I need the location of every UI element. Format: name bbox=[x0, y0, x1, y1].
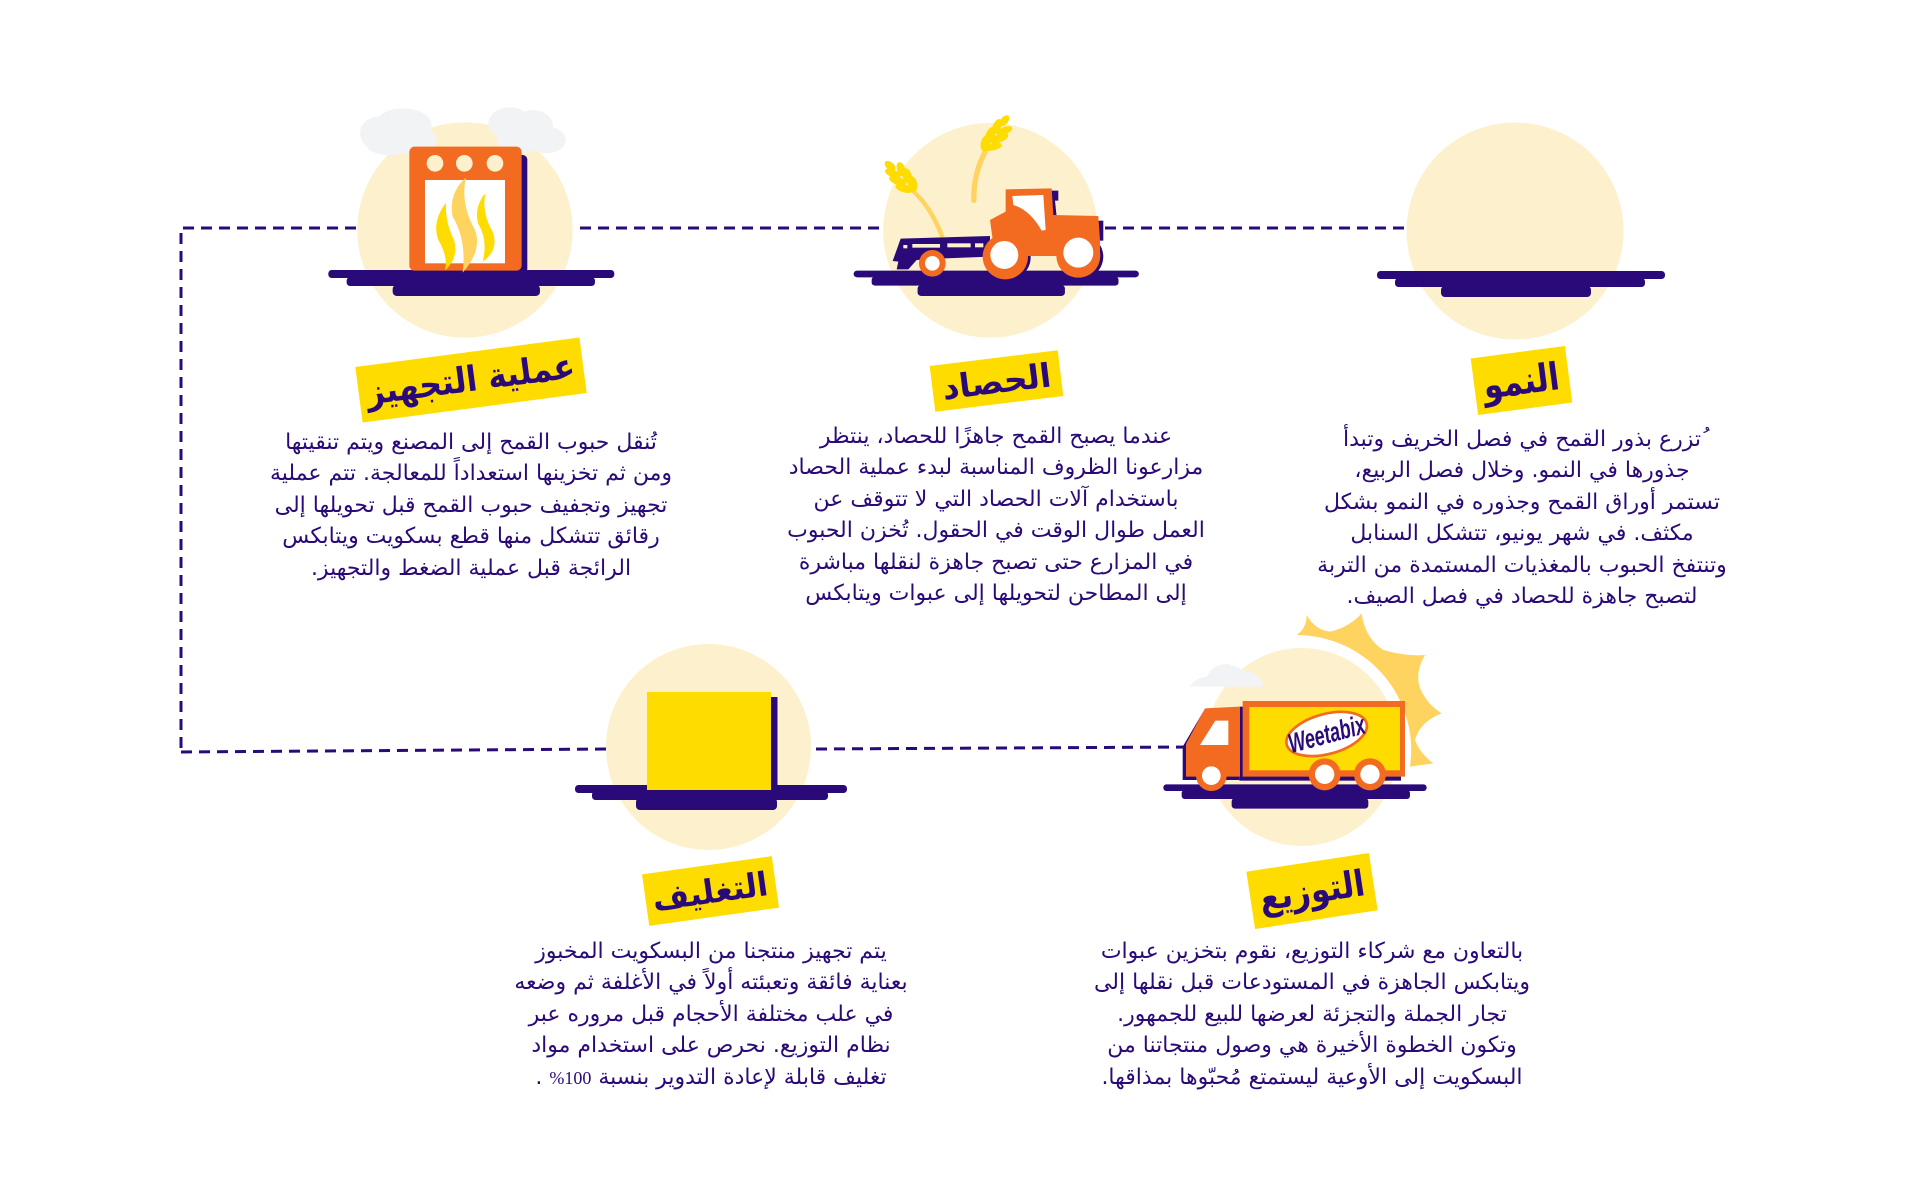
text block: distribution bbox=[1094, 939, 1530, 1090]
text block: harvest: العمل طوال الوقت في الحقول. تُخزن الحبوب bbox=[787, 518, 1205, 543]
text block: growth: مكثف. في شهر يونيو، تتشكل السنابل bbox=[1350, 521, 1694, 546]
heading: harvest: الحصاد bbox=[939, 355, 1053, 407]
step 2 illustration: harvest tractor bbox=[854, 114, 1139, 338]
tractor bbox=[983, 188, 1103, 280]
text block: harvest: في المزارع حتى تصبح جاهزة لنقلها مباشرة bbox=[799, 550, 1193, 575]
text block: processing: تجهيز وتجفيف حبوب القمح قبل تحويلها إلى bbox=[275, 493, 667, 518]
Weetabix logo: Weetabix bbox=[1285, 708, 1370, 759]
step 5 illustration: delivery truck bbox=[1163, 613, 1442, 846]
text block: distribution: بالتعاون مع شركاء التوزيع، نقوم بتخزين عبوات bbox=[1101, 939, 1523, 964]
text block: distribution: وتكون الخطوة الأخيرة هي وصول منتجاتنا من bbox=[1107, 1033, 1517, 1058]
text block: packaging: نظام التوزيع. نحرص على استخدام مواد bbox=[531, 1033, 891, 1058]
truck bbox=[1183, 701, 1405, 791]
Weetabix logo bbox=[1282, 704, 1372, 764]
ground bbox=[1163, 784, 1427, 809]
heading: processing: عملية التجهيز bbox=[364, 346, 578, 414]
text block: harvest bbox=[787, 424, 1205, 606]
text block: growth: ُتزرع بذور القمح في فصل الخريف وتبدأ bbox=[1343, 427, 1701, 452]
text block: growth: وتنتفخ الحبوب بالمغذيات المستمدة من التربة bbox=[1317, 553, 1727, 578]
text block: growth: تستمر أوراق القمح وجذوره في النمو بشكل bbox=[1324, 490, 1720, 515]
text block: distribution: ويتابكس الجاهزة في المستودعات قبل نقلها إلى bbox=[1094, 970, 1530, 995]
step 4 illustration: packaging bbox=[575, 644, 847, 850]
ground bbox=[328, 270, 614, 296]
text block: harvest: مزارعونا الظروف المناسبة لبدء عملية الحصاد bbox=[789, 455, 1203, 480]
text block: packaging: في علب مختلفة الأحجام قبل مروره عبر bbox=[529, 1002, 893, 1027]
text block: processing: تُنقل حبوب القمح إلى المصنع ويتم تنقيتها bbox=[285, 430, 657, 455]
text block: packaging: بعناية فائقة وتعبئته أولاً في الأغلفة ثم وضعه bbox=[514, 970, 908, 995]
text block: packaging: تغليف قابلة لإعادة التدوير بنسبة %100 . bbox=[535, 1065, 887, 1090]
ground bbox=[854, 271, 1139, 296]
steam clouds bbox=[360, 107, 566, 155]
cloud bbox=[1190, 664, 1264, 687]
package box bbox=[647, 692, 771, 790]
wheat stalks bbox=[882, 114, 1014, 237]
text block: distribution: تجار الجملة والتجزئة لعرضها للبيع للجمهور. bbox=[1117, 1002, 1507, 1027]
text block: distribution: البسكويت إلى الأوعية ليستمتع مُحبّوها بمذاقها. bbox=[1101, 1065, 1523, 1090]
heading: packaging: التغليف bbox=[650, 864, 770, 918]
text block: growth bbox=[1317, 424, 1727, 609]
step 3 illustration: oven bbox=[328, 107, 614, 338]
text block: growth: جذورها في النمو. وخلال فصل الربيع، bbox=[1354, 458, 1690, 483]
text block: packaging: يتم تجهيز منتجنا من البسكويت المخبوز bbox=[535, 939, 887, 964]
step 1 illustration: growth bbox=[1377, 122, 1665, 340]
sun bbox=[1297, 613, 1442, 767]
text block: growth: لتصبح جاهزة للحصاد في فصل الصيف. bbox=[1347, 584, 1697, 609]
text block: packaging bbox=[514, 939, 908, 1090]
heading: growth bbox=[1470, 346, 1572, 415]
heading: growth: النمو bbox=[1480, 354, 1562, 407]
trailer bbox=[893, 236, 990, 277]
flames bbox=[436, 177, 495, 273]
text block: processing: رقائق تتشكل منها قطع بسكويت ويتابكس bbox=[282, 524, 660, 549]
text block: processing bbox=[270, 430, 672, 581]
text block: processing: ومن ثم تخزينها استعداداً للمعالجة. تتم عملية bbox=[270, 461, 672, 486]
heading: distribution: التوزيع bbox=[1256, 863, 1368, 919]
text block: harvest: باستخدام آلات الحصاد التي لا تتوقف عن bbox=[814, 487, 1178, 512]
dashed process connector bbox=[181, 228, 1404, 752]
heading: packaging bbox=[642, 856, 778, 926]
oven body bbox=[409, 147, 527, 273]
text block: harvest: إلى المطاحن لتحويلها إلى عبوات ويتابكس bbox=[805, 581, 1187, 606]
text block: harvest: عندما يصبح القمح جاهزًا للحصاد، ينتظر bbox=[820, 424, 1172, 449]
trailer and tractor bbox=[893, 188, 1103, 280]
heading: distribution bbox=[1246, 853, 1378, 929]
text block: processing: الرائجة قبل عملية الضغط والتجهيز. bbox=[311, 556, 631, 581]
